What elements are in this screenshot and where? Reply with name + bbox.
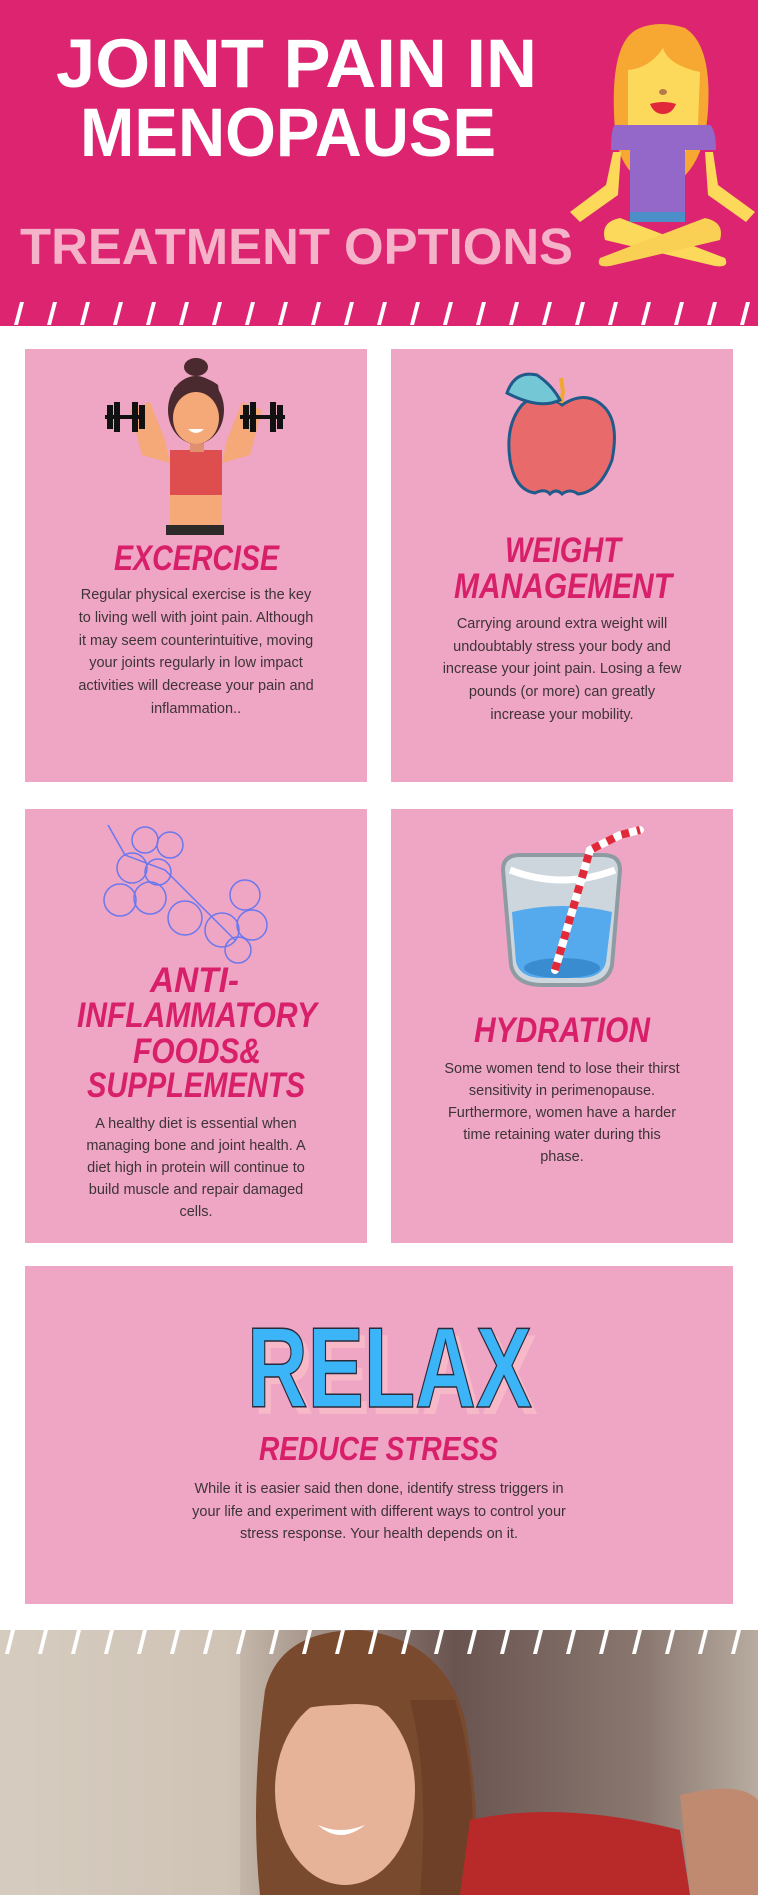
icon: blueberries [104, 825, 267, 963]
text: weight body: pounds (or more) can greatly [469, 684, 656, 700]
text: hydration body: sensitivity in perimenopause. [469, 1083, 655, 1099]
text: weight body: Carrying around extra weight will [457, 616, 667, 632]
subtitle: treatment options: TREATMENT OPTIONS [20, 218, 573, 275]
text: anti-inflammatory body: diet high in protein will continue to [87, 1160, 305, 1176]
text: hydration body: Some women tend to lose their thirst [444, 1061, 680, 1077]
heading: anti-inflammatory foods & supplements [77, 961, 319, 1105]
heading: anti-inflammatory foods & supplements: ANTI- [149, 961, 239, 1000]
text: hydration body: Furthermore, women have a harder [448, 1105, 676, 1121]
heading: hydration: HYDRATION [474, 1011, 651, 1050]
icon: meditating woman [570, 24, 755, 266]
text: anti-inflammatory body: A healthy diet is essential when [95, 1116, 297, 1132]
text: exercise body: Regular physical exercise is the key [81, 587, 312, 603]
text: relax body: stress response. Your health depends on it. [240, 1526, 518, 1542]
text: exercise body [78, 587, 314, 717]
panel: weight management [391, 349, 733, 782]
text: relax body: While it is easier said then done, identify stress triggers in [194, 1481, 564, 1497]
panel: relax [25, 1266, 733, 1604]
panel: hydration [391, 809, 733, 1243]
heading: anti-inflammatory foods & supplements: FOODS& [133, 1032, 261, 1071]
heading: relax: RELAX [247, 1305, 532, 1432]
heading: anti-inflammatory foods & supplements: INFLAMMATORY [77, 996, 319, 1035]
photo: smiling woman [0, 1630, 758, 1895]
text: exercise body: it may seem counterintuitive, moving [79, 633, 313, 649]
heading: excercise: EXCERCISE [114, 539, 280, 578]
text: relax body [192, 1481, 566, 1542]
text: weight body: undoubtably stress your body and [453, 639, 671, 655]
text: exercise body: inflammation.. [151, 701, 241, 717]
title [56, 25, 537, 171]
heading: anti-inflammatory foods & supplements: SUPPLEMENTS [87, 1066, 305, 1105]
header band [0, 0, 758, 326]
text: hydration body [444, 1061, 680, 1165]
heading: weight management [454, 531, 674, 606]
icon: apple [507, 374, 614, 494]
text: weight body: increase your mobility. [490, 707, 634, 723]
text: hydration body: time retaining water during this [463, 1127, 661, 1143]
text: anti-inflammatory body: cells. [179, 1204, 213, 1220]
text: hydration body: phase. [540, 1149, 584, 1165]
text: anti-inflammatory body: managing bone and joint health. A [86, 1138, 306, 1154]
title: MENOPAUSE [80, 94, 496, 171]
text: weight body: increase your joint pain. Losing a few [443, 661, 682, 677]
text: anti-inflammatory body [86, 1116, 306, 1220]
text: exercise body: activities will decrease your pain and [78, 678, 314, 694]
text: weight body [443, 616, 682, 723]
heading: weight management: MANAGEMENT [454, 567, 674, 606]
heading: weight management: WEIGHT [505, 531, 623, 570]
heading: reduce stress: REDUCE STRESS [259, 1430, 498, 1467]
heading: relax: RELAX [253, 1312, 538, 1439]
title: JOINT PAIN IN [56, 25, 537, 102]
text: relax body: your life and experiment with different ways to control your [192, 1504, 566, 1520]
panel: exercise [25, 349, 367, 782]
text: exercise body: your joints regularly in low impact [89, 655, 303, 671]
text: anti-inflammatory body: build muscle and repair damaged [89, 1182, 303, 1198]
icon: woman with dumbbells [105, 358, 285, 535]
icon: glass of water with straw [503, 830, 640, 985]
text: exercise body: to living well with joint pain. Although [79, 610, 313, 626]
panel: anti-inflammatory foods [25, 809, 367, 1243]
